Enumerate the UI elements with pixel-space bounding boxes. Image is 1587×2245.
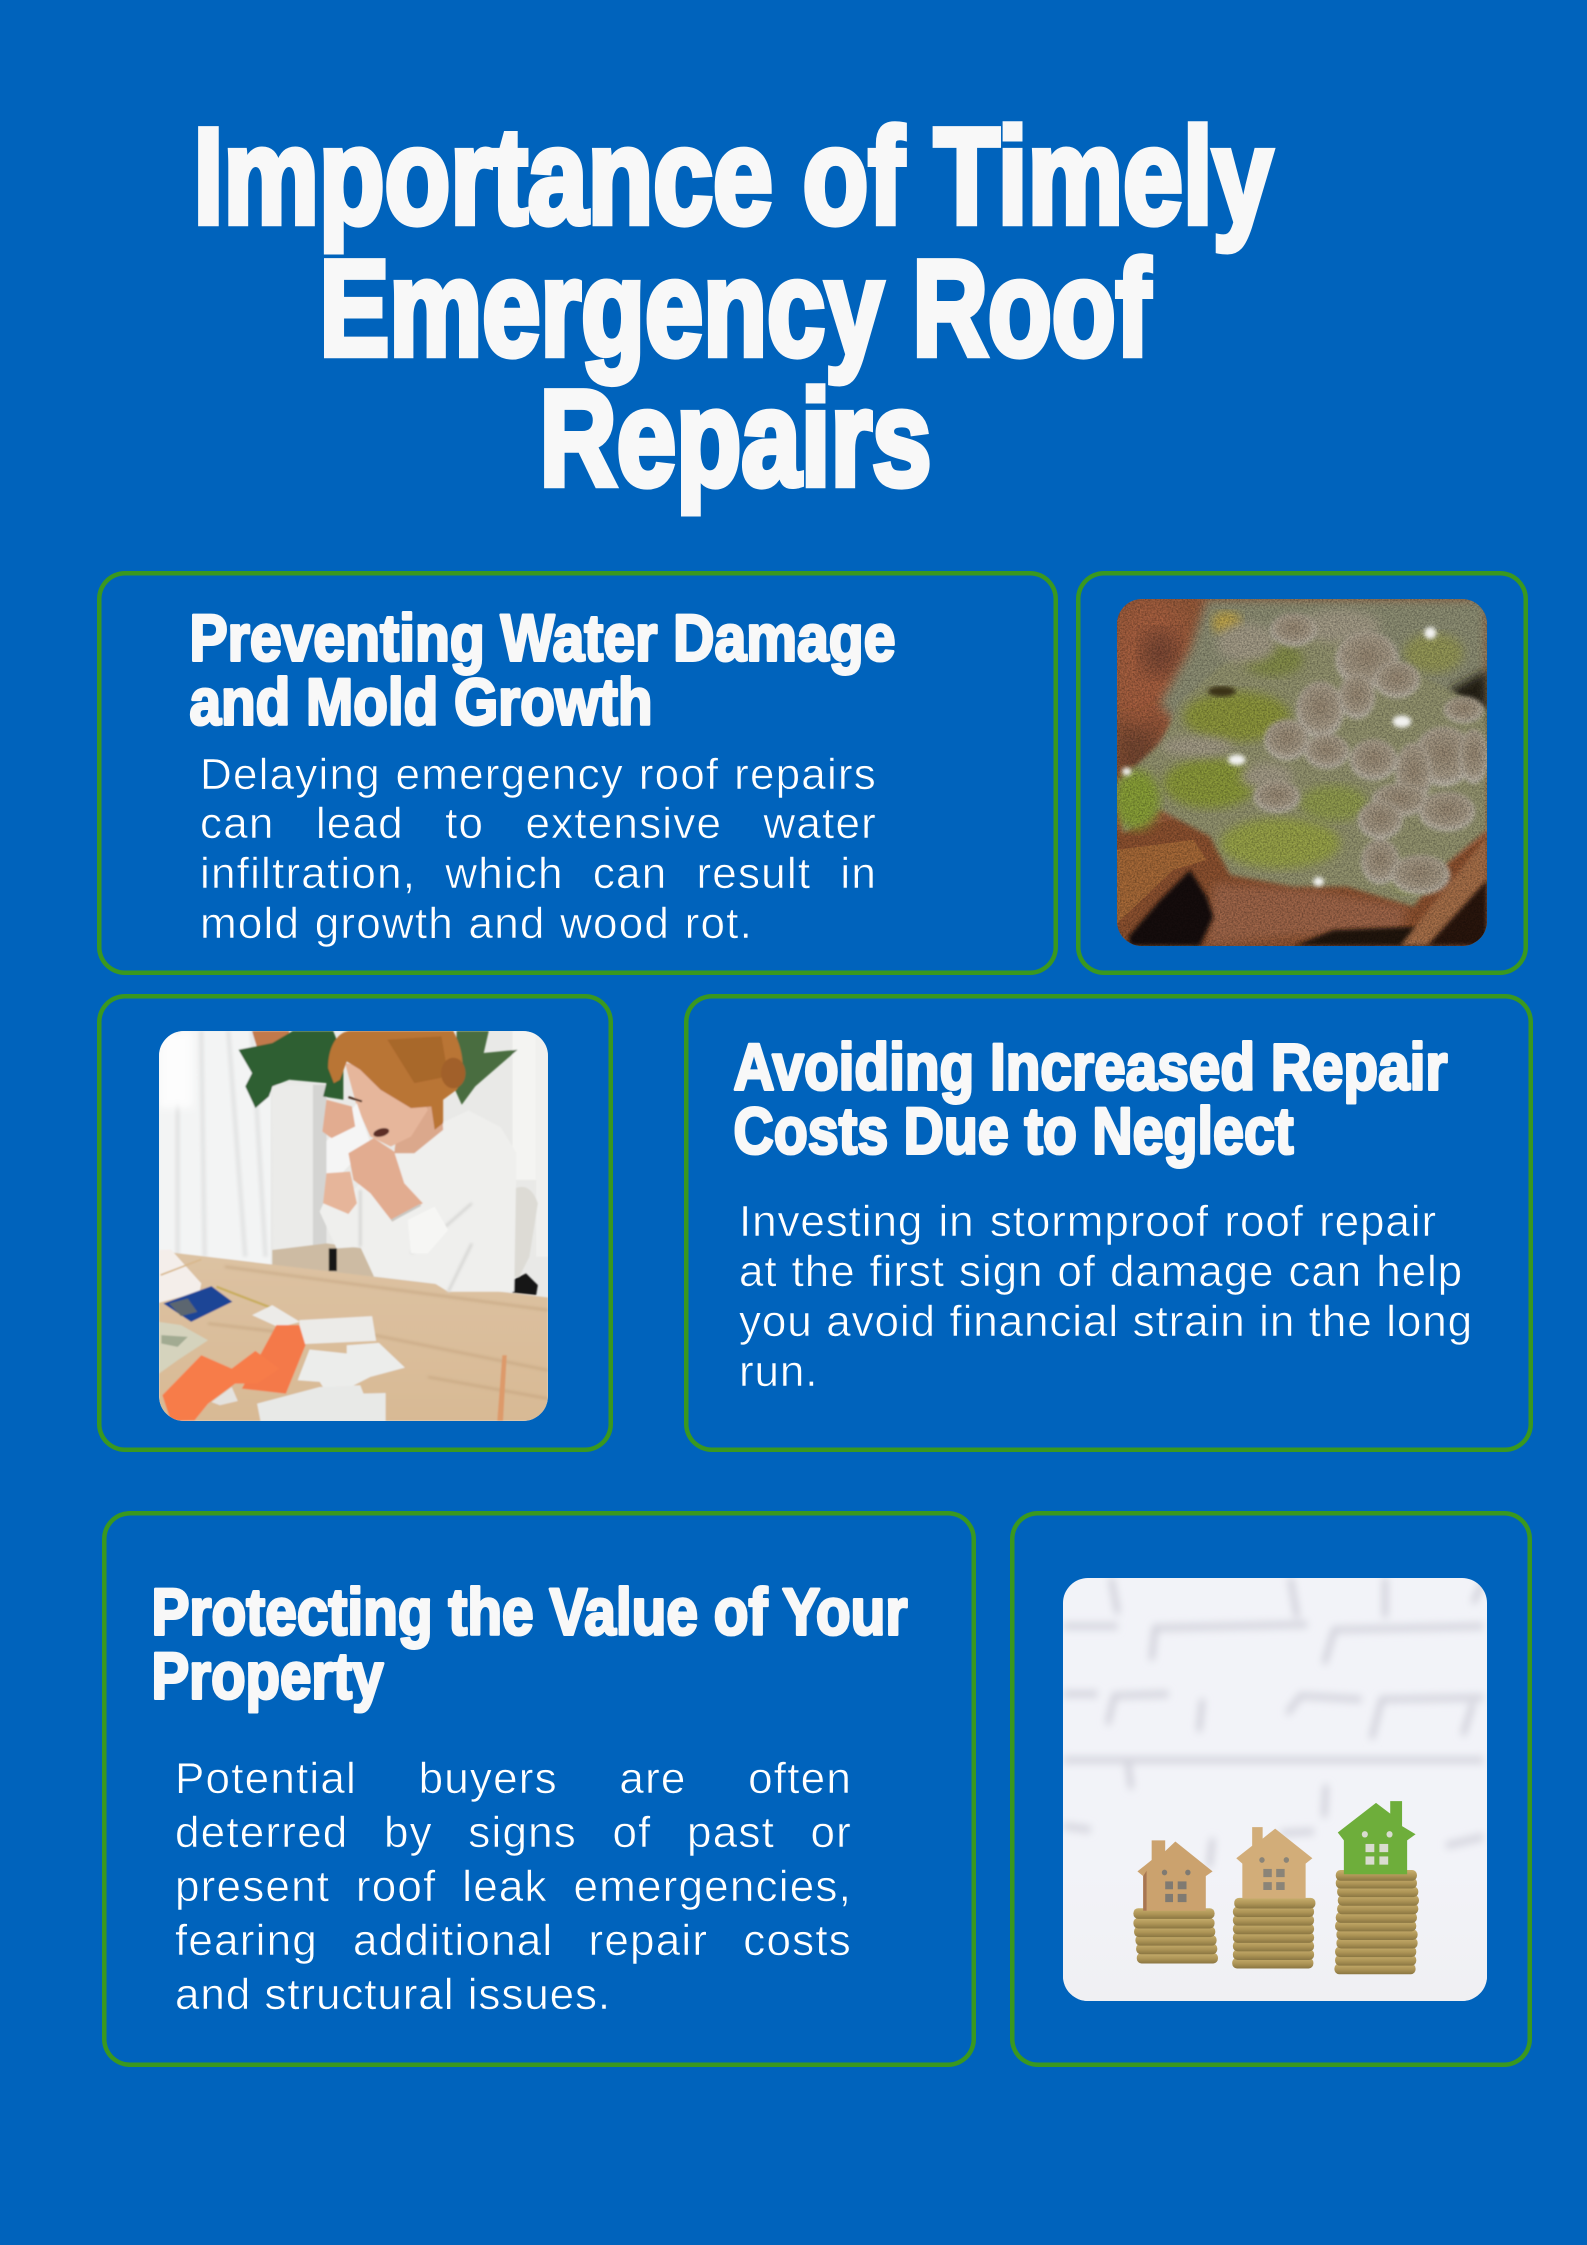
- photo: model houses on coin stacks: [1063, 1578, 1487, 2001]
- heading: avoiding increased repair costs: [734, 1030, 1448, 1169]
- heading: protecting property value: Property: [152, 1638, 384, 1712]
- body text: protecting property value: present roof leak emergencies,: [175, 1862, 852, 1911]
- body text: preventing water damage: mold growth and wood rot.: [200, 899, 753, 948]
- body text: protecting property value: [175, 1754, 852, 2019]
- body text: avoiding increased repair costs: [739, 1196, 1473, 1396]
- panel: preventing water damage: [97, 571, 1058, 975]
- panel: stressed woman photo frame: [97, 994, 613, 1452]
- heading: avoiding increased repair costs: Avoiding Increased Repair: [734, 1030, 1448, 1104]
- body text: preventing water damage: Delaying emergency roof repairs: [200, 750, 877, 798]
- heading: preventing water damage: Preventing Water Damage: [190, 600, 896, 674]
- title: Repairs: [540, 362, 932, 514]
- body text: preventing water damage: can lead to extensive water: [200, 799, 877, 848]
- body text: avoiding increased repair costs: at the first sign of damage can help: [739, 1246, 1463, 1296]
- body text: preventing water damage: infiltration, which can result in: [200, 849, 877, 898]
- body text: protecting property value: and structural issues.: [175, 1970, 611, 2019]
- table objects: [159, 1249, 201, 1303]
- panel: avoiding increased repair costs: [684, 994, 1533, 1452]
- heading: protecting property value: Protecting the Value of Your: [152, 1574, 908, 1648]
- panel: mold photo frame: [1076, 571, 1528, 975]
- photo: mold on wood: [1117, 599, 1487, 946]
- title: [194, 100, 1276, 516]
- coin stack 1: [1133, 1908, 1218, 1964]
- heading: preventing water damage: [190, 600, 896, 738]
- title: Importance of Timely: [194, 100, 1272, 252]
- body text: protecting property value: Potential buyers are often: [175, 1754, 852, 1803]
- coin stack 2: [1232, 1898, 1315, 1969]
- panel: houses photo frame: [1010, 1511, 1532, 2067]
- body text: protecting property value: fearing additional repair costs: [175, 1916, 852, 1965]
- woman: [320, 1110, 517, 1292]
- heading: preventing water damage: and Mold Growth: [190, 664, 652, 738]
- body text: avoiding increased repair costs: run.: [739, 1346, 818, 1396]
- heading: protecting property value: [152, 1574, 908, 1714]
- wooden house 1: [1137, 1840, 1213, 1911]
- body text: preventing water damage: [200, 750, 877, 948]
- body text: avoiding increased repair costs: Investing in stormproof roof repair: [739, 1196, 1437, 1246]
- body text: avoiding increased repair costs: you avoid financial strain in the long: [739, 1296, 1473, 1346]
- coin stack 3: [1334, 1870, 1419, 1974]
- panel: protecting property value: [102, 1511, 976, 2067]
- wooden house 2: [1236, 1827, 1312, 1899]
- photo: woman crying over bills: [159, 1031, 548, 1421]
- title: Emergency Roof: [320, 232, 1151, 384]
- heading: avoiding increased repair costs: Costs Due to Neglect: [734, 1094, 1294, 1168]
- green house: [1338, 1801, 1416, 1874]
- body text: protecting property value: deterred by signs of past or: [175, 1808, 852, 1857]
